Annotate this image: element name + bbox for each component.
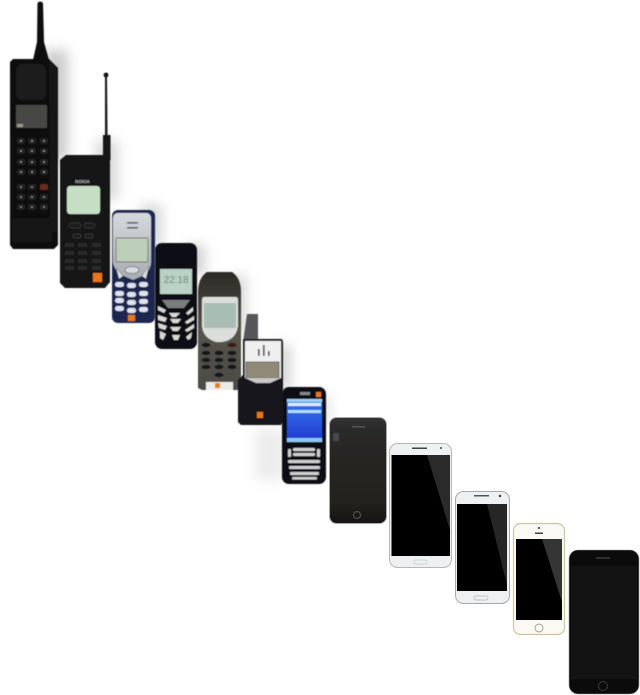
body [282, 387, 326, 484]
clock: 22:18 [163, 275, 189, 286]
keypad [17, 138, 48, 210]
antenna [33, 2, 49, 60]
phone 3: Nokia 3310 [112, 210, 155, 323]
base [12, 218, 52, 242]
phone 10: Samsung Galaxy S4 mini [456, 492, 510, 604]
glare [333, 433, 339, 441]
body [60, 155, 110, 288]
phone 5: Nokia 6210 [198, 272, 241, 390]
screen [204, 303, 236, 328]
phone 9: Samsung Galaxy S4 [390, 444, 452, 568]
body [112, 210, 155, 323]
body [10, 59, 58, 249]
phone 6: Ericsson T68 [238, 314, 283, 425]
keypad [202, 343, 236, 377]
glare [487, 504, 507, 585]
silver face [113, 213, 151, 280]
nav keys [69, 223, 95, 238]
body [198, 272, 241, 390]
screen [392, 455, 450, 556]
body [514, 524, 564, 634]
orange logo [215, 383, 220, 388]
white panel [245, 341, 281, 378]
speaker [352, 426, 365, 428]
keyboard [288, 448, 320, 480]
orange logo [93, 273, 102, 282]
key glyphs [20, 140, 45, 208]
earpiece [16, 64, 46, 100]
speaker [474, 495, 489, 496]
screen [516, 539, 562, 620]
keypad [65, 243, 101, 270]
antenna [103, 76, 110, 160]
keypad [115, 282, 148, 313]
phone 8: iPhone 3G black [330, 418, 386, 524]
body [569, 550, 639, 694]
body [155, 243, 197, 349]
orange logo [257, 412, 263, 418]
camera and speaker [538, 527, 540, 529]
speaker [127, 222, 138, 229]
brand: NOKIA [75, 179, 90, 184]
speaker and logo [300, 392, 310, 395]
screen [116, 238, 148, 262]
body [330, 418, 386, 524]
glare [427, 455, 450, 530]
phone 12: iPhone 6 black [569, 550, 639, 694]
phone 1: Motorola brick [10, 2, 58, 249]
phone 11: iPhone 5s gold [514, 524, 564, 634]
home button [598, 682, 608, 690]
home button [535, 624, 543, 632]
keypad [158, 306, 194, 340]
nav [162, 300, 190, 308]
nav button [125, 266, 139, 274]
screen [287, 399, 322, 442]
screen [160, 269, 192, 294]
screen [246, 362, 279, 378]
bottom plate [206, 382, 233, 390]
phone 2: Nokia candybar [60, 73, 110, 288]
screen [16, 105, 47, 128]
logo [258, 345, 270, 356]
antenna flap [243, 314, 258, 342]
home button [474, 596, 488, 600]
screen [457, 504, 507, 591]
phone 7: smartphone with keyboard [282, 387, 326, 484]
home button [414, 560, 427, 564]
speaker [596, 558, 610, 559]
silver face [202, 297, 238, 342]
orange logo [128, 315, 135, 321]
glare [542, 539, 562, 602]
phone 4: Nokia 3510 [155, 243, 197, 349]
body [238, 339, 283, 425]
body [390, 444, 452, 568]
screen [571, 566, 637, 679]
speaker [412, 448, 427, 449]
soft shadows behind the phones [44, 50, 328, 480]
home button [354, 512, 360, 518]
hinge [245, 378, 281, 383]
body [456, 492, 510, 604]
screen [67, 186, 100, 214]
